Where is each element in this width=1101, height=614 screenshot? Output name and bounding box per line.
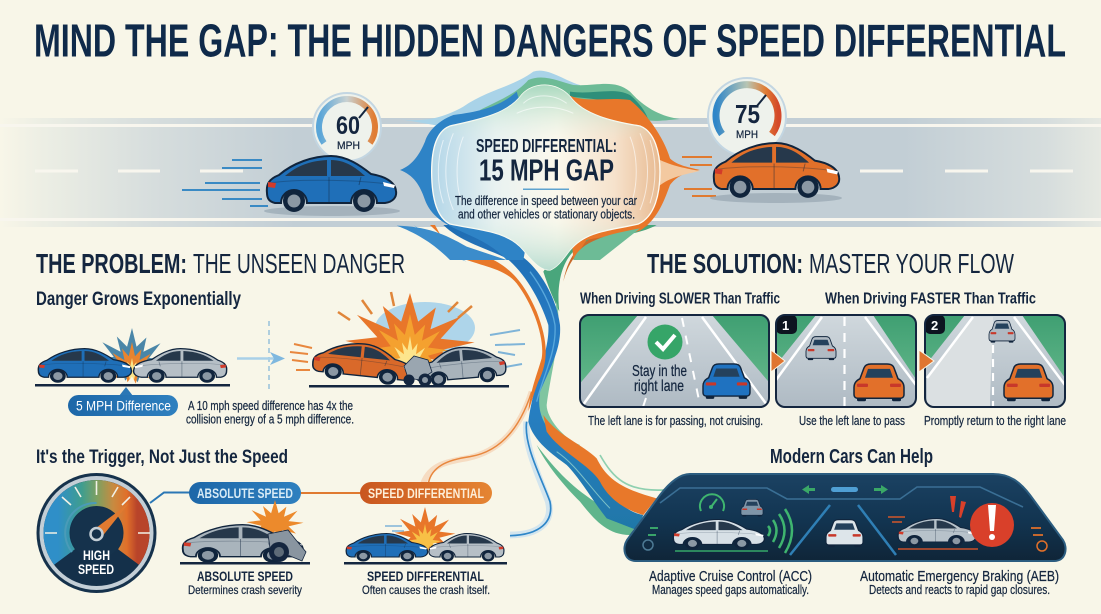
pill: absolute speed: [189, 482, 301, 504]
gauge: 60 mph: 60: [336, 112, 360, 140]
label: adaptive cruise control: Manages speed gaps automatically.: [652, 583, 809, 597]
centre bubble: speed differential: SPEED DIFFERENTIAL:: [476, 136, 617, 156]
caption: step 2: Promptly return to the right lane: [924, 414, 1066, 428]
blue car with speed lines: [182, 156, 400, 216]
centre bubble: speed differential: [397, 71, 700, 270]
panel: stay in the right lane: right lane: [634, 378, 684, 395]
arrow: step one: [771, 350, 785, 372]
centre bubble: speed differential: and other vehicles or stationary objects.: [458, 208, 635, 222]
connector: gauge to absolute speed: [150, 492, 190, 503]
gauge: 75 mph: 75: [735, 99, 760, 129]
icon: check mark: [648, 324, 682, 360]
lane lines: [790, 505, 896, 555]
label: absolute speed: ABSOLUTE SPEED: [197, 568, 293, 584]
subheading: modern cars: Modern Cars Can Help: [770, 446, 933, 468]
gauge: 75 mph: [708, 78, 786, 156]
text: collision energy: [186, 399, 354, 426]
panel: step 2 return: [924, 314, 1066, 408]
gauge: high speed: HIGH: [83, 548, 110, 563]
centre bubble: speed differential: 15 MPH GAP: [479, 152, 614, 188]
text: collision energy: A 10 mph speed difference has 4x the: [188, 399, 353, 413]
label: automatic emergency braking: Automatic Emergency Braking (AEB): [860, 569, 1059, 585]
illustration: damaged car: [180, 500, 310, 564]
AEB car: [888, 517, 978, 549]
heading: the solution: THE SOLUTION:: [647, 248, 803, 279]
ACC car: [673, 520, 768, 551]
label: absolute speed: [188, 568, 302, 597]
flowing streams from the centre: [413, 225, 663, 536]
caption: left lane: The left lane is for passing, not cruising.: [588, 414, 763, 428]
label: adaptive cruise control: Adaptive Cruise Control (ACC): [649, 569, 812, 585]
label: speed differential: SPEED DIFFERENTIAL: [367, 568, 484, 584]
label: speed differential: [362, 568, 490, 597]
panel: step 1 pass: 1: [782, 318, 789, 333]
gauge: high speed: SPEED: [78, 562, 114, 577]
label: absolute speed: Determines crash severity: [188, 583, 302, 597]
heading: the solution: [647, 248, 1014, 279]
icon: warning: [950, 496, 1014, 547]
subheading: danger grows: Danger Grows Exponentially: [36, 288, 241, 310]
label: adaptive cruise control: [649, 569, 812, 597]
pill: absolute speed: ABSOLUTE SPEED: [197, 486, 293, 501]
panel: stay in the right lane: [579, 314, 770, 408]
panel: stay in the right lane: Stay in the: [632, 363, 687, 380]
callout: 5 mph difference: [68, 387, 178, 416]
status icons: [643, 528, 1047, 551]
panel: step 1 pass: [775, 314, 917, 408]
subheading: driving slower: When Driving SLOWER Than Traffic: [580, 290, 780, 308]
panel: car dashboard: [624, 474, 1066, 561]
pill: speed differential: SPEED DIFFERENTIAL: [368, 486, 484, 501]
gauge: 75 mph: MPH: [736, 129, 758, 141]
label: automatic emergency braking: Detects and reacts to rapid gap closures.: [869, 583, 1050, 597]
label: automatic emergency braking: [860, 569, 1059, 597]
illustration: 10 mph collision: [290, 292, 525, 388]
panel: step 2 return: 2: [931, 318, 938, 333]
pill: speed differential: [360, 482, 492, 504]
icon: green gauge: [700, 494, 724, 511]
top indicators: [802, 485, 888, 494]
heading: the problem: [36, 248, 405, 279]
heading: the solution: MASTER YOUR FLOW: [809, 248, 1014, 279]
subheading: trigger: It's the Trigger, Not Just the Speed: [36, 446, 288, 468]
orange car with speed lines: [682, 143, 842, 203]
caption: step 1: Use the left lane to pass: [799, 414, 905, 428]
gauge: 60 mph: [313, 93, 381, 161]
heading: the problem: THE UNSEEN DANGER: [193, 248, 405, 279]
text: collision energy: collision energy of a 5 mph difference.: [186, 412, 354, 426]
icon: radar waves: [768, 509, 792, 553]
illustration: differential collision: [344, 507, 507, 564]
callout: 5 mph difference: 5 MPH Difference: [76, 398, 171, 414]
illustration: 5 mph collision: [35, 328, 230, 386]
heading: the problem: THE PROBLEM:: [36, 248, 187, 279]
road band: [0, 118, 1101, 227]
arrow: growth: [237, 321, 285, 389]
label: speed differential: Often causes the crash itself.: [362, 583, 490, 597]
connector: absolute speed to differential: [301, 492, 361, 494]
centre bubble: speed differential: The difference in speed between your car: [455, 194, 637, 208]
arrow: step two: [919, 350, 934, 372]
gauge: 60 mph: MPH: [337, 140, 360, 152]
subheading: driving faster: When Driving FASTER Than Traffic: [825, 290, 1036, 308]
gauge: high speed: [36, 473, 156, 593]
